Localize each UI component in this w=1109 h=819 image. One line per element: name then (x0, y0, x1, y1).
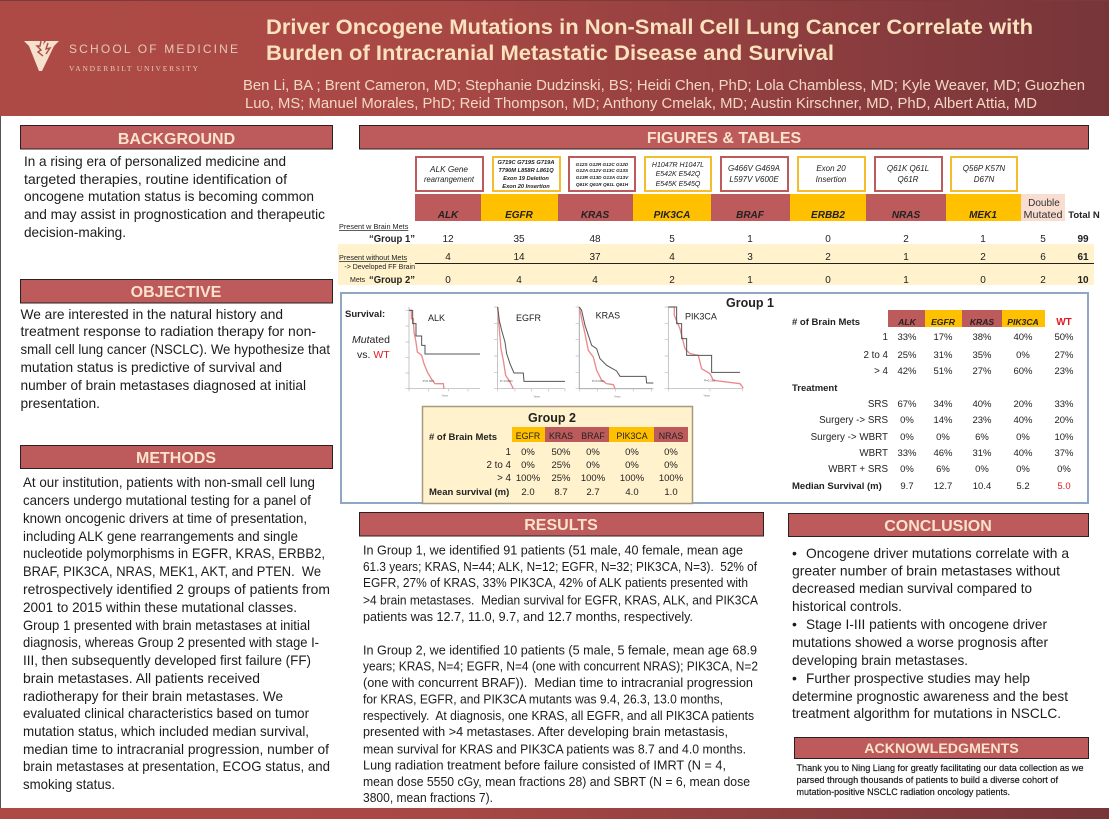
mutation counts: 0 (825, 234, 831, 245)
mutation counts: 99 (1077, 234, 1089, 245)
heading: objective (20, 280, 332, 303)
mutation detail labels: G466V G469A (728, 164, 780, 173)
group 1 rows: 37% (1054, 448, 1074, 459)
mutation counts: 35 (513, 234, 525, 245)
group 1 rows: 33% (897, 332, 917, 343)
group 1 header: PIK3CA (1007, 317, 1039, 327)
chart: ALK survival: P=0.069 (423, 379, 434, 383)
mutation counts: 2 (1040, 275, 1046, 286)
results text: In Group 2, we identified 10 patients (5 male, 5 female, mean age 68.9 (363, 642, 757, 658)
mutation detail labels: D67N (974, 175, 994, 184)
group 1 rows: 38% (972, 332, 992, 343)
mutation counts: 4 (669, 252, 675, 263)
group 1 rows: 40% (1013, 415, 1033, 426)
group 2 header: PIK3CA (616, 431, 648, 441)
group 2 rows: 50% (551, 447, 571, 458)
chart: KRAS survival (576, 307, 653, 399)
group 1 header: EGFR (931, 317, 956, 327)
heading: background: BACKGROUND (118, 131, 235, 148)
conclusion bullets: • (792, 616, 797, 632)
heading: conclusion (788, 514, 1088, 536)
group 1 rows: 20% (1013, 399, 1033, 410)
authors: Luo, MS; Manuel Morales, PhD; Reid Thompson, MD; Anthony Cmelak, MD; Austin Kirschner, MD, PhD, Albert Attia, MD (245, 96, 1037, 112)
title (266, 16, 1033, 65)
conclusion bullets: determine prognostic awareness and the best (792, 688, 1068, 704)
group 2 rows: 0% (664, 460, 678, 471)
heading: results: RESULTS (524, 517, 598, 534)
group 1 rows: 50% (1054, 332, 1074, 343)
survival legend: Survival: (345, 309, 385, 320)
conclusion bullets: mutations showed a worse prognosis after (792, 634, 1048, 650)
methods text: including ALK gene rearrangements and single (23, 528, 298, 544)
group 2 rows (429, 447, 684, 498)
heading: figures and tables: FIGURES & TABLES (647, 130, 802, 147)
results text: (one with concurrent BRAF)). Median time to intracranial progression (363, 675, 753, 690)
heading: group 1: Group 1 (726, 296, 774, 310)
results text: years; KRAS, N=4; EGFR, N=4 (one with concurrent NRAS); PIK3CA, N=2 (363, 658, 758, 674)
chart: EGFR survival: Years (533, 395, 541, 399)
mutation detail labels: Q61K Q61R Q61L Q61H (576, 182, 629, 187)
results text: mean dose 5550 cGy, mean fractions 28) and SBRT (N = 6, mean dose (363, 774, 750, 789)
gene header cells: ERBB2 (811, 210, 845, 221)
results text (363, 542, 758, 805)
mutation table (338, 157, 1100, 286)
row labels: “Group 1” (369, 233, 415, 245)
group 1 rows: 46% (933, 448, 953, 459)
group 1 rows: 6% (936, 464, 950, 475)
mutation counts: 2 (825, 252, 831, 263)
chart: PIK3CA survival: P=0.224 (704, 378, 716, 382)
results text: respectively. At diagnosis, one KRAS, all EGFR, and all PIK3CA patients (363, 708, 754, 723)
background text: decision-making. (24, 224, 126, 240)
objective text: presentation. (20, 395, 100, 411)
heading: methods (20, 446, 332, 468)
group 2 rows: 2.0 (521, 487, 535, 498)
conclusion bullets: Oncogene driver mutations correlate with a (806, 545, 1069, 561)
mutation detail labels: Exon 19 Deletion (503, 176, 549, 182)
results text: patients was 12.7, 11.0, 9.7, and 12.7 months, respectively. (363, 609, 693, 624)
chart: ALK survival: Years (441, 394, 449, 398)
group 1 rows: 5.2 (1016, 481, 1030, 492)
mutation detail boxes (416, 157, 1017, 191)
row labels: -> Developed FF Brain (344, 264, 415, 271)
objective text (20, 306, 330, 411)
group 1 rows: 0% (1016, 432, 1030, 443)
group 2 header: EGFR (516, 431, 540, 441)
group 1 rows: 9.7 (900, 481, 914, 492)
panel: acknowledgments (794, 738, 1088, 798)
mutation counts: 1 (747, 275, 753, 286)
group 1 rows: 0% (1057, 464, 1071, 475)
group 1 rows (792, 332, 1074, 492)
mutation counts: 10 (1077, 275, 1089, 286)
group 1 rows: 0% (900, 432, 914, 443)
heading: conclusion: CONCLUSION (884, 518, 992, 535)
mutation detail labels: Q56P K57N (963, 164, 1005, 173)
acknowledgments text (796, 763, 1084, 798)
chart: PIK3CA survival (665, 307, 743, 398)
group 2 rows: 0% (586, 460, 600, 471)
mutation detail labels: E542K E542Q (656, 171, 701, 178)
mutation counts: 2 (980, 252, 986, 263)
conclusion bullets: greater number of brain metastases without (792, 562, 1060, 578)
group 2 rows: 0% (521, 460, 535, 471)
header banner (0, 0, 1109, 116)
gene header cells: ALK (437, 210, 459, 221)
chart: EGFR survival: P<0.0001 (500, 379, 513, 383)
mutation counts: 0 (980, 275, 986, 286)
conclusion bullets: historical controls. (792, 598, 902, 614)
group 1 rows: SRS (868, 399, 888, 410)
acknowledgments text: mutation-positive NSCLC radiation oncology patients. (796, 787, 1010, 798)
row labels (339, 222, 415, 286)
results text: presented with >4 metastases. After developing brain metastasis, (363, 724, 728, 739)
background text (24, 153, 325, 240)
methods text: 2001 to 2015 within these mutational classes. (23, 599, 297, 615)
group 1 header: WT (1056, 317, 1072, 328)
group 1 rows: 0% (900, 415, 914, 426)
group 1 rows: 0% (975, 464, 989, 475)
group 2 rows: 100% (659, 473, 684, 484)
group 1 rows: 0% (900, 464, 914, 475)
mutation counts: 1 (903, 275, 909, 286)
group 1 rows: > 4 (874, 366, 889, 377)
mutation counts: 14 (513, 252, 525, 263)
results text: >4 brain metastases. Median survival for EGFR, KRAS, ALK, and PIK3CA (363, 592, 758, 608)
group 1 rows: 27% (972, 366, 992, 377)
mutation counts: 37 (589, 252, 601, 263)
group 2 rows: 1.0 (664, 487, 678, 498)
group 2 header: # of Brain Mets (429, 432, 497, 443)
mutation counts: 4 (516, 275, 522, 286)
gene header cells: BRAF (736, 210, 765, 221)
methods text: evaluated clinical characteristics based on tumor (23, 705, 309, 721)
panel: background (20, 126, 332, 240)
survival plots (405, 307, 743, 399)
group 2 rows: 0% (625, 447, 639, 458)
conclusion bullets: Stage I-III patients with oncogene driver (806, 616, 1047, 632)
mutation counts: 1 (747, 234, 753, 245)
group 1 rows: 42% (897, 366, 917, 377)
footer band (0, 808, 1109, 819)
methods text: diagnosis, whereas Group 2 presented with stage I- (23, 634, 319, 650)
group 1 rows: Treatment (792, 383, 838, 394)
group 2 rows: 4.0 (625, 487, 639, 498)
acknowledgments text: Thank you to Ning Liang for greatly facilitating our data collection as we (796, 763, 1084, 774)
mutation detail labels: Insertion (816, 175, 847, 184)
mutation detail labels (424, 160, 1005, 190)
chart: PIK3CA survival: Years (703, 394, 711, 398)
group 1 rows: 0% (1016, 350, 1030, 361)
mutation detail labels: E545K E545Q (656, 181, 701, 188)
methods text: BRAF, PIK3CA, NRAS, MEK1, AKT, and PTEN. We (23, 563, 321, 579)
mutation counts: 48 (589, 234, 601, 245)
heading: acknowledgments (794, 738, 1088, 758)
gene header cells: KRAS (581, 210, 609, 221)
title: Driver Oncogene Mutations in Non-Small Cell Lung Cancer Correlate with (266, 16, 1033, 39)
row labels: Present without Mets (339, 253, 407, 262)
heading: results (360, 512, 764, 536)
group 1 rows: 67% (897, 399, 917, 410)
conclusion bullets: developing brain metastases. (792, 652, 968, 668)
group 1 rows: 23% (972, 415, 992, 426)
panel: group 1 and group 2 figures (341, 293, 1088, 504)
mutation counts: 3 (747, 252, 753, 263)
group 2 rows: 100% (581, 473, 606, 484)
group 1 rows: 1 (883, 332, 888, 343)
mutation detail labels: G12S G12R G12C G12D (576, 162, 629, 167)
heading: methods: METHODS (136, 450, 216, 467)
group 1 rows: 31% (933, 350, 953, 361)
group 1 rows: 12.7 (934, 481, 952, 492)
mutation counts (442, 234, 1089, 286)
group 1 rows: WBRT + SRS (828, 464, 888, 475)
chart: EGFR survival: EGFR (516, 313, 541, 323)
mutation counts: 2 (669, 275, 675, 286)
group 2 rows: 1 (506, 447, 511, 458)
group 1 header (792, 310, 1072, 328)
results text: EGFR, 27% of KRAS, 33% PIK3CA, 42% of ALK patients presented with (363, 575, 748, 590)
mutation detail labels: T790M L858R L861Q (498, 168, 554, 174)
group 2 rows: 2.7 (586, 487, 600, 498)
mutation counts: 4 (445, 252, 451, 263)
methods text: known oncogenic drivers at time of presentation, (23, 510, 307, 526)
methods text: retrospectively identified 2 groups of patients from (23, 581, 330, 597)
objective text: treatment response to radiation therapy for non- (20, 323, 316, 339)
gene header cells (415, 194, 1100, 221)
chart: ALK survival (405, 307, 480, 398)
acknowledgments text: parsed through thousands of patients to build a diverse cohort of (796, 775, 1058, 786)
group 1 rows: 40% (972, 399, 992, 410)
heading: acknowledgments: ACKNOWLEDGMENTS (864, 741, 1019, 757)
gene header cells: PIK3CA (654, 210, 690, 221)
background text: In a rising era of personalized medicine and (24, 153, 286, 169)
authors (243, 78, 1085, 112)
cream rows (338, 244, 1094, 285)
mutation counts: 5 (669, 234, 675, 245)
methods text: nucleotide polymorphisms in EGFR, KRAS, ERBB2, (23, 545, 325, 561)
group 1 rows: WBRT (859, 448, 888, 459)
mutation counts: 0 (825, 275, 831, 286)
group 2 rows: 2 to 4 (486, 460, 512, 471)
background text: oncogene mutation status is becoming common (24, 188, 314, 204)
row labels: Present w Brain Mets (339, 222, 409, 231)
results text: for KRAS, EGFR, and PIK3CA mutants was 9.4, 26.3, 13.0 months, (363, 692, 723, 706)
group 1 rows: 33% (1054, 399, 1074, 410)
chart: KRAS survival: P=0.0001 (592, 379, 605, 383)
group 2 rows: 0% (664, 447, 678, 458)
group 2 rows: 8.7 (554, 487, 568, 498)
chart: KRAS survival: Years (614, 395, 621, 399)
conclusion bullets: Further prospective studies may help (806, 670, 1030, 686)
mutation counts: 6 (1040, 252, 1046, 263)
group 1 rows: Median Survival (m) (792, 481, 882, 492)
group 1 header: ALK (897, 317, 917, 327)
panel: objective (20, 280, 332, 411)
mutation counts: 4 (592, 275, 598, 286)
gene header cells: Total N (1068, 210, 1100, 221)
objective text: We are interested in the natural history and (20, 306, 283, 322)
results text: mean survival for KRAS and PIK3CA patients was 8.7 and 4.0 months. (363, 742, 746, 756)
chart: PIK3CA survival: PIK3CA (685, 312, 717, 322)
mutation counts: 2 (903, 234, 909, 245)
conclusion bullets: • (792, 670, 797, 686)
group 1 rows: 60% (1013, 366, 1033, 377)
gene header cells: Double (1028, 198, 1060, 209)
methods text: brain metastases at presentation, ECOG status, and (23, 758, 330, 774)
group 1 rows: 35% (972, 350, 992, 361)
methods text (23, 474, 330, 792)
panel: methods (20, 446, 332, 792)
objective text: number of brain metastases diagnosed at initial (20, 377, 306, 393)
group 2 rows: 0% (586, 447, 600, 458)
group 2 rows: 0% (625, 460, 639, 471)
results text: In Group 1, we identified 91 patients (51 male, 40 female, mean age (363, 542, 743, 558)
heading: figures and tables (360, 126, 1088, 149)
group 1 rows: 20% (1054, 415, 1074, 426)
group 1 rows: 25% (897, 350, 917, 361)
group 2 header: BRAF (581, 431, 605, 441)
background text: targeted therapies, routine identification of (24, 171, 287, 187)
methods text: Group 1 presented with brain metastases at initial (23, 617, 310, 633)
mutation counts: 61 (1077, 252, 1089, 263)
group 1 rows: 33% (897, 448, 917, 459)
logo text: Vanderbilt University: VANDERBILT UNIVERSITY (69, 64, 199, 73)
chart: KRAS survival: KRAS (596, 311, 620, 321)
title: Burden of Intracranial Metastatic Disease and Survival (266, 42, 834, 65)
group 2 rows: 100% (516, 473, 541, 484)
row labels: “Group 2” (369, 274, 415, 286)
mutation counts: 12 (442, 234, 454, 245)
heading: background (20, 126, 332, 149)
objective text: mutation status is predictive of survival and (20, 359, 282, 375)
heading: group 2: Group 2 (528, 411, 576, 425)
group 2 header (429, 427, 688, 443)
conclusion bullets: decreased median survival compared to (792, 580, 1032, 596)
mutation detail labels: L597V V600E (729, 175, 779, 184)
methods text: At our institution, patients with non-small cell lung (23, 474, 315, 490)
panel: results (360, 512, 764, 805)
mutation counts: 5 (1040, 234, 1046, 245)
group 2 rows: 25% (551, 460, 571, 471)
group 1 table (792, 310, 1074, 492)
methods text: smoking status. (23, 776, 115, 792)
gene header cells: MEK1 (969, 210, 997, 221)
panel: group 2 table (422, 406, 692, 504)
survival legend: vs. WT (357, 349, 390, 361)
gene header cells: EGFR (505, 210, 534, 221)
group 1 rows: 40% (1013, 448, 1033, 459)
group 1 rows: 10.4 (973, 481, 991, 492)
group 1 rows: 51% (933, 366, 953, 377)
methods text: brain metastases. All patients received (23, 670, 260, 686)
mutation detail labels: Exon 20 (816, 164, 846, 173)
group 1 rows: 5.0 (1057, 481, 1071, 492)
mutation counts: 1 (980, 234, 986, 245)
authors: Ben Li, BA ; Brent Cameron, MD; Stephanie Dudzinski, BS; Heidi Chen, PhD; Lola Chambless, MD; Kyle Weaver, MD; Guozhen (243, 78, 1085, 94)
heading: objective: OBJECTIVE (131, 284, 222, 301)
chart: EGFR survival (494, 307, 565, 399)
mutation detail labels: G719C G719S G719A (498, 160, 554, 166)
group 2 header: KRAS (549, 431, 573, 441)
logo text: school of medicine: SCHOOL OF MEDICINE (69, 42, 238, 56)
survival legend: Mutated (352, 334, 390, 346)
background text: and may assist in prognostication and therapeutic (24, 206, 325, 222)
group 2 header: NRAS (659, 431, 683, 441)
mutation detail labels: Q61K Q61L (887, 164, 929, 173)
mutation detail labels: Exon 20 Insertion (502, 184, 550, 190)
conclusion bullets (792, 545, 1069, 721)
results text: 61.3 years; KRAS, N=44; ALK, N=12; EGFR, N=32; PIK3CA, N=3). 52% of (363, 559, 757, 574)
methods text: median time to intracranial progression, number of (23, 741, 329, 757)
methods text: radiotherapy for their brain metastases. We (23, 688, 283, 704)
group 1 rows: 10% (1054, 432, 1074, 443)
group 1 rows: 34% (933, 399, 953, 410)
survival legend (345, 309, 390, 361)
group 1 rows: 0% (1016, 464, 1030, 475)
panel: conclusion (788, 514, 1088, 721)
mutation counts: 1 (903, 252, 909, 263)
group 2 rows: Mean survival (m) (429, 487, 509, 498)
group 1 rows: 0% (936, 432, 950, 443)
group 1 rows: 27% (1054, 350, 1074, 361)
group 1 rows: 14% (933, 415, 953, 426)
mutation detail labels: Q61R (898, 175, 919, 184)
group 1 rows: 17% (933, 332, 953, 343)
chart: ALK survival: ALK (428, 313, 445, 323)
group 1 rows: 6% (975, 432, 989, 443)
gene header cells: NRAS (892, 210, 920, 221)
results text: Lung radiation treatment before failure consisted of IMRT (N = 4, (363, 758, 726, 772)
icon: Vanderbilt V logo (24, 41, 59, 71)
group 2 rows: 25% (551, 473, 571, 484)
objective text: small cell lung cancer (NSCLC). We hypothesize that (20, 341, 330, 357)
mutation counts: 0 (445, 275, 451, 286)
conclusion bullets: treatment algorithm for mutations in NSCLC. (792, 705, 1061, 721)
group 2 rows: 0% (521, 447, 535, 458)
mutation detail labels: H1047R H1047L (652, 162, 704, 169)
group 1 rows: Surgery -> SRS (819, 415, 888, 426)
mutation detail labels: rearrangement (424, 175, 475, 184)
methods text: mutation status, which included median survival, (23, 723, 309, 739)
group 1 rows: 23% (1054, 366, 1074, 377)
mutation detail labels: G12A G12V G13C G13S (576, 168, 629, 173)
row labels: Mets (350, 277, 366, 284)
group 1 header: # of Brain Mets (792, 317, 860, 328)
group 2 rows: 100% (620, 473, 645, 484)
methods text: III, then subsequently developed first failure (FF) (23, 652, 311, 668)
results text: 3800, mean fractions 7). (363, 790, 493, 805)
group 1 rows: 40% (1013, 332, 1033, 343)
mutation detail labels: ALK Gene (429, 165, 469, 174)
group 1 rows: 2 to 4 (863, 350, 889, 361)
group 2 rows: > 4 (497, 473, 512, 484)
methods text: cancers undergo mutational testing for a panel of (23, 492, 311, 508)
gene header cells: Mutated (1024, 210, 1062, 221)
group 1 rows: Surgery -> WBRT (811, 432, 888, 443)
group 1 rows: 31% (972, 448, 992, 459)
mutation detail labels: G13R G13D G13A G13V (576, 175, 629, 180)
conclusion bullets: • (792, 545, 797, 561)
group 1 header: KRAS (970, 317, 994, 327)
